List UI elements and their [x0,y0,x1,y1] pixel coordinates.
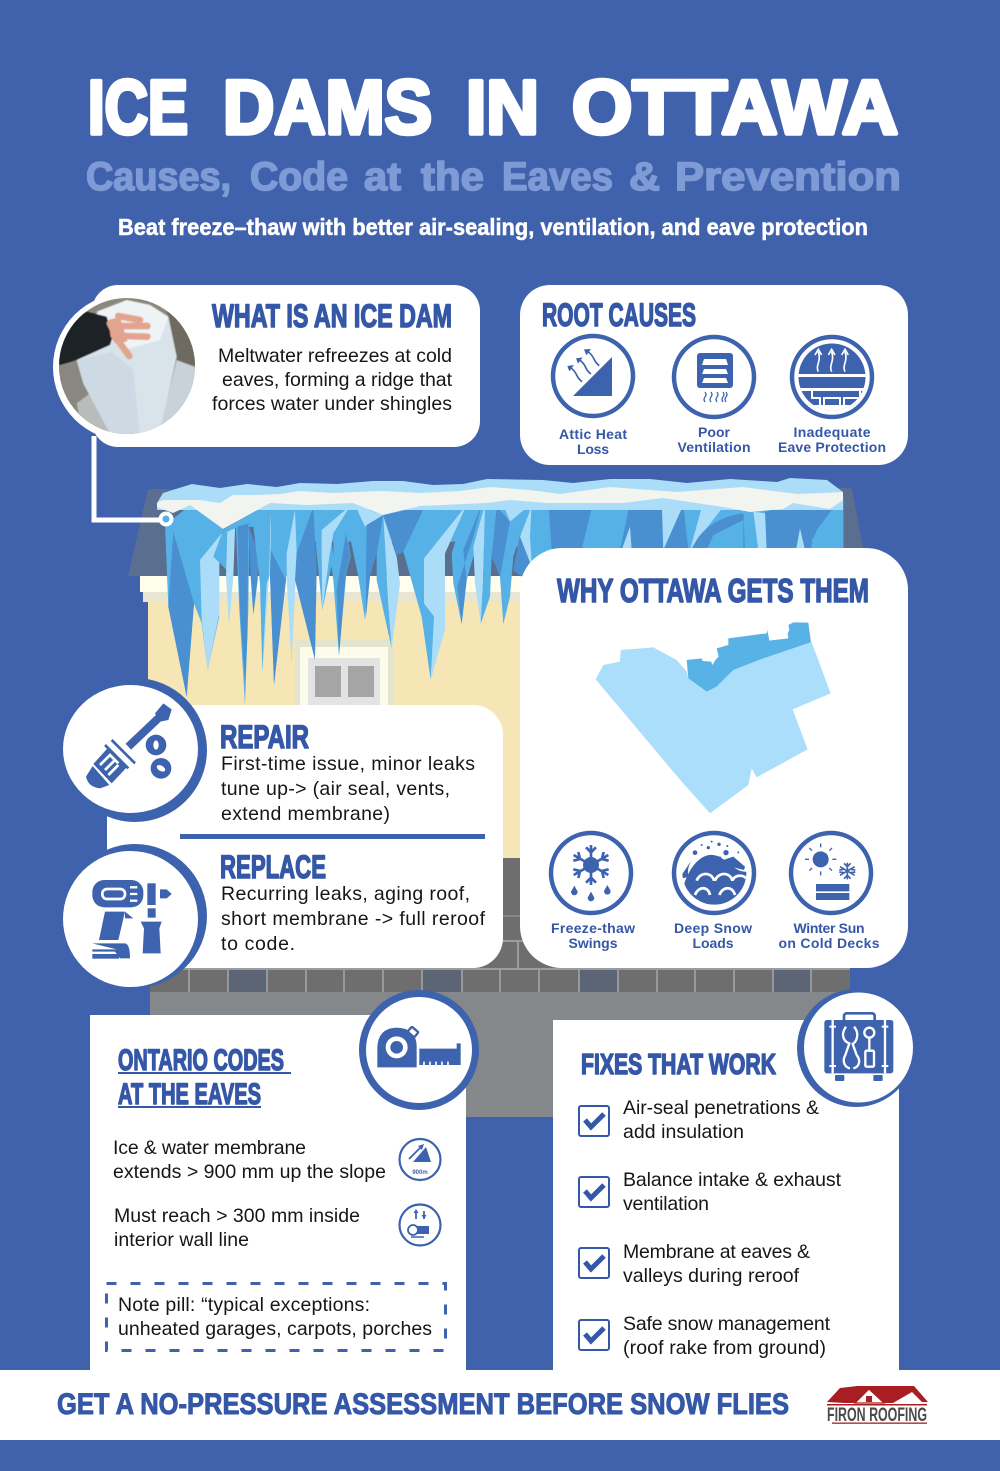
rule 1 text: Ice & water membrane [113,1137,306,1159]
callout connector [94,436,174,526]
heading [118,1044,291,1111]
rule 1 text [113,1137,386,1183]
fix item 1: add insulation [623,1121,744,1143]
label [778,920,880,951]
rule 2 text [114,1205,360,1251]
replace text: short membrane -> full reroof [221,908,486,930]
body text: Meltwater refreezes at cold [218,345,452,367]
label [674,920,752,951]
heading: ROOT CAUSES [542,297,696,333]
label: Attic Heat [559,426,627,442]
icon: slope [400,1139,440,1180]
subtitle: Prevention [675,155,901,199]
icon: drill [63,844,207,988]
panel: repair and replace [63,678,503,988]
tagline: Beat freeze–thaw with better air-sealing, ventilation, and eave protection [118,214,868,240]
panel: root causes [520,285,908,465]
replace heading: REPLACE [220,849,326,885]
label: Poor [698,424,731,440]
repair text [221,753,475,825]
logo: FIRON ROOFING [827,1405,927,1426]
label: on Cold Decks [778,935,880,951]
fix item 2: Balance intake & exhaust [623,1169,842,1191]
label: Eave Protection [778,439,886,455]
panel: ontario codes [90,994,476,1375]
replace text: Recurring leaks, aging roof, [221,883,470,905]
icon: brush [63,678,207,822]
repair text: First-time issue, minor leaks [221,753,475,775]
heading: AT THE EAVES [118,1078,261,1111]
fix item 4: Safe snow management [623,1313,831,1335]
body text: forces water under shingles [212,393,452,415]
icon: tape measure [362,994,476,1106]
foundation [150,992,850,1117]
icon: slope: 900m [412,1170,428,1176]
replace text [221,883,486,955]
label: Swings [568,935,618,951]
panel: why ottawa gets them [520,548,908,968]
subtitle: at [364,155,401,199]
body text [212,345,453,415]
label: Inadequate [794,424,871,440]
repair text: tune up-> (air seal, vents, [221,778,450,800]
heading: FIXES THAT WORK [581,1049,776,1081]
repair heading: REPAIR [220,719,309,755]
icon: toolbox [797,989,915,1107]
label [778,424,886,455]
panel: fixes that work [553,989,915,1375]
icicles left [165,500,543,705]
fix item 2 [579,1169,842,1215]
roof [128,488,868,576]
fix item 1 [579,1097,819,1143]
title: OTTAWA [572,66,898,150]
icon: attic heat loss [553,336,633,416]
note callout: Note pill: “typical exceptions: [118,1294,370,1316]
note callout [106,1284,446,1350]
fix item 2: ventilation [623,1193,709,1215]
fix item 3: valleys during reroof [623,1265,800,1287]
fascia [140,576,530,602]
label [551,920,635,951]
window [295,639,393,709]
divider [180,834,485,839]
label: Ventilation [678,439,750,455]
replace text: to code. [221,933,295,955]
icon: deep snow loads [674,833,754,913]
subtitle: Code [250,155,348,199]
label [678,424,750,455]
icon: poor ventilation [674,337,754,417]
snow on the eaves [157,478,843,529]
fix item 1: Air-seal penetrations & [623,1097,819,1119]
body text: eaves, forming a ridge that [222,369,453,391]
icon: winter sun [791,833,871,913]
subtitle: Causes, [86,155,231,199]
house illustration [128,488,868,1117]
subtitle [86,155,901,199]
brick wall [150,858,850,992]
fix item 4 [579,1313,831,1359]
title: IN [466,66,539,150]
subtitle: Eaves [502,155,613,199]
label: Freeze-thaw [551,920,635,936]
heading: WHY OTTAWA GETS THEM [557,572,869,609]
fix item 3 [579,1241,810,1287]
subtitle: the [421,155,484,199]
footer banner [0,1370,1000,1440]
icon: inadequate eave protection [792,337,872,417]
rule 1 text: extends > 900 mm up the slope [113,1161,386,1183]
fix item 4: (roof rake from ground) [623,1337,826,1359]
logo [827,1386,928,1426]
rule 2 text: interior wall line [114,1229,249,1251]
title: ICE [88,66,188,150]
heading: ONTARIO CODES [118,1044,284,1077]
title [88,66,898,150]
photo of ice dam [59,298,195,434]
heading: WHAT IS AN ICE DAM [212,298,452,334]
icon: membrane roll [400,1204,440,1246]
title: DAMS [223,66,432,150]
icon: freeze-thaw [551,833,631,913]
icicles right [530,497,843,563]
note callout: unheated garages, carpots, porches [118,1318,432,1340]
wall [148,602,528,858]
label: Loss [577,441,609,457]
subtitle: & [629,155,660,199]
fix item 3: Membrane at eaves & [623,1241,810,1263]
label: Deep Snow [674,920,752,936]
rule 2 text: Must reach > 300 mm inside [114,1205,360,1227]
label: Loads [692,935,734,951]
call to action: GET A NO-PRESSURE ASSESSMENT BEFORE SNOW FLIES [57,1388,789,1421]
label: Winter Sun [794,920,864,936]
map of Ottawa [596,622,831,813]
panel: what is an ice dam [53,285,480,447]
label [559,426,627,457]
repair text: extend membrane) [221,803,390,825]
